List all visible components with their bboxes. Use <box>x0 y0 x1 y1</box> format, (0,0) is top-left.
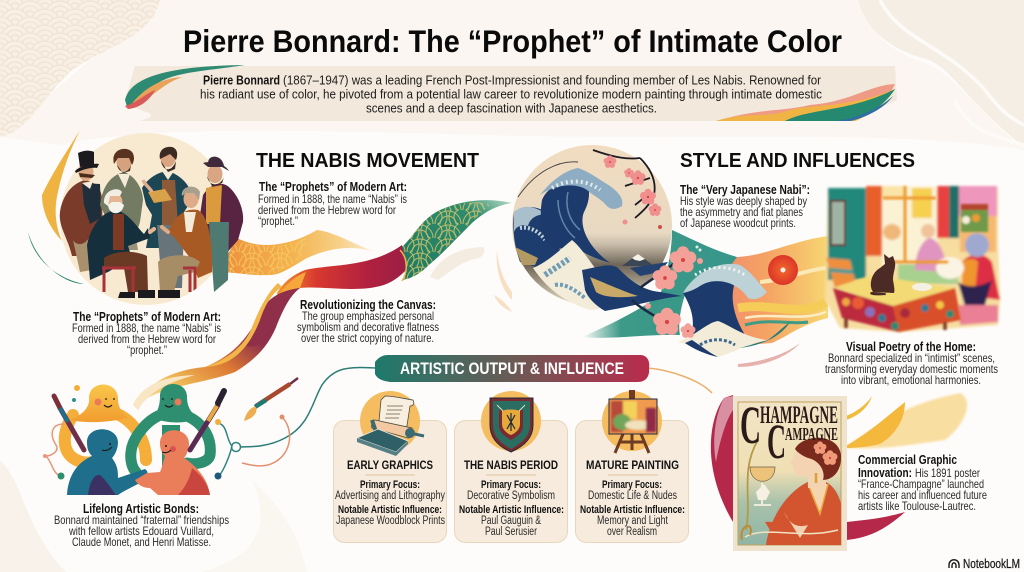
small painting on wall <box>961 204 988 232</box>
text block: prophets of modern art (below portrait): Formed in 1888, the name “Nabis” is <box>72 321 221 335</box>
lower navy wave and boat <box>582 262 682 311</box>
text block: lifelong artistic bonds: Bonnard maintained “fraternal” friendships <box>54 513 229 527</box>
card body: Paul Gauguin & <box>481 515 541 527</box>
ribbon: right teal, salmon and yellow wash <box>582 230 828 345</box>
teal arc beside portrait <box>28 232 84 284</box>
text block: prophets of modern art (below portrait): derived from the Hebrew word for <box>78 332 216 346</box>
paint brushes held <box>54 391 224 450</box>
text block: commercial graphic innovation: Commercial Graphic <box>858 452 957 467</box>
card body: Primary Focus: <box>481 479 541 491</box>
text block: prophets of modern art (right): “prophet.” <box>258 214 298 228</box>
card body <box>459 479 564 538</box>
intro text: his radiant use of color, he pivoted from a potential law career to revolutionize modern painting through intimate domestic <box>200 86 822 102</box>
text block: very Japanese Nabi: His style was deeply shaped by <box>680 194 807 208</box>
text block: prophets of modern art (below portrait) <box>72 309 221 357</box>
card body: Notable Artistic Influence: <box>580 504 685 516</box>
text block: commercial graphic innovation: His 1891 poster <box>915 466 980 480</box>
text block: lifelong artistic bonds: Lifelong Artistic Bonds: <box>83 501 199 516</box>
seated man with grey hair <box>158 187 212 298</box>
illustration: four friends <box>43 384 240 495</box>
text block: lifelong artistic bonds: Claude Monet, and Henri Matisse. <box>72 535 211 549</box>
yellow arc beside portrait <box>42 130 80 241</box>
intro brush stroke: orange left <box>130 77 182 108</box>
card heading: MATURE PAINTING <box>586 458 679 472</box>
text block: revolutionizing the canvas <box>297 297 439 345</box>
card: the Nabis period <box>454 391 568 542</box>
text block: revolutionizing the canvas: symbolism and decorative flatness <box>297 320 439 334</box>
intro band <box>125 65 897 121</box>
intro text: Pierre Bonnard <box>203 72 280 88</box>
text block: visual poetry of the home: Visual Poetry of the Home: <box>846 339 976 354</box>
card body: Primary Focus: <box>602 479 662 491</box>
text block: prophets of modern art (right) <box>258 179 407 228</box>
text block: revolutionizing the canvas: Revolutionizing the Canvas: <box>300 297 436 312</box>
card body <box>335 479 445 527</box>
text block: revolutionizing the canvas: over the strict copying of nature. <box>301 331 434 345</box>
green ribbon end <box>400 200 512 281</box>
card body: Japanese Woodblock Prints <box>336 515 445 527</box>
card body: Advertising and Lithography <box>335 490 445 502</box>
section heading: the Nabis movement: THE NABIS MOVEMENT <box>256 150 479 172</box>
section banner: artistic output and influence: ARTISTIC OUTPUT & INFLUENCE <box>400 359 624 378</box>
yellow figure <box>65 384 146 463</box>
hair <box>795 438 841 480</box>
illustration: domestic painting <box>825 186 1000 332</box>
card body: Primary Focus: <box>360 479 420 491</box>
cat <box>870 254 895 295</box>
poster lettering: AMPAGNE <box>785 424 838 444</box>
intro text: scenes and a deep fascination with Japanese aesthetics. <box>366 100 657 116</box>
text block: lifelong artistic bonds <box>54 501 229 549</box>
teacup <box>912 283 932 291</box>
icon: shield crest <box>481 391 541 452</box>
text block: commercial graphic innovation <box>858 452 987 513</box>
connector lines <box>240 368 712 466</box>
card body: Notable Artistic Influence: <box>459 504 564 516</box>
section heading: style and influences: STYLE AND INFLUENCES <box>680 150 915 172</box>
card heading: THE NABIS PERIOD <box>464 458 558 472</box>
poster lettering <box>740 395 838 469</box>
ribbon: left flowing ribbons <box>28 130 512 410</box>
title: Pierre Bonnard: The “Prophet” of Intimate Color <box>183 23 842 59</box>
card body: Memory and Light <box>597 515 669 527</box>
card heading: EARLY GRAPHICS <box>347 458 433 472</box>
intro text <box>200 72 822 116</box>
card body: over Realism <box>607 526 657 538</box>
illustration: great wave <box>512 145 798 357</box>
text block: prophets of modern art (below portrait): “prophet.” <box>127 343 167 357</box>
painting frame on wall <box>831 201 845 245</box>
cherry branch upper with blossoms <box>593 150 662 229</box>
left waves <box>513 207 566 268</box>
green figure <box>131 384 210 472</box>
pale beige blob <box>430 247 484 280</box>
poster lettering: C <box>740 395 761 455</box>
orange figure <box>135 430 210 495</box>
text block: commercial graphic innovation: “France-Champagne” launched <box>858 477 984 491</box>
card: early graphics <box>334 391 446 542</box>
cherry branches lower <box>632 246 703 338</box>
champagne glass <box>750 467 775 481</box>
intro brush stroke: right waves <box>716 84 895 121</box>
text block: prophets of modern art (right): Formed in 1888, the name “Nabis” is <box>258 192 407 206</box>
text block: visual poetry of the home: into vibrant, emotional harmonies. <box>841 373 981 387</box>
man with brown hat <box>200 157 243 292</box>
intro text: (1867–1947) was a leading French Post-Impressionist and founding member of Les Nabis. Renowned for <box>283 72 822 88</box>
text block: very Japanese Nabi: the asymmetry and fiat planes <box>680 205 803 219</box>
diagonal purple and yellow ribbon tail <box>134 283 300 407</box>
earring <box>815 473 817 483</box>
text block: commercial graphic innovation: his career and influenced future <box>858 488 987 502</box>
icon: paint brush <box>244 378 298 421</box>
orange upper ribbon <box>218 230 378 275</box>
blue figure <box>67 429 148 495</box>
man with book <box>142 147 192 288</box>
flowers in hair <box>814 441 837 465</box>
text block: prophets of modern art (below portrait): The “Prophets” of Modern Art: <box>73 309 221 324</box>
card body <box>580 479 685 538</box>
illustration: France-Champagne poster <box>733 395 847 551</box>
card: mature painting <box>576 390 688 542</box>
text block: commercial graphic innovation: Innovation: <box>858 465 912 480</box>
decorative squiggles and dots <box>43 385 240 480</box>
section banner: artistic output and influence <box>375 355 649 382</box>
card body: Notable Artistic Influence: <box>338 504 442 516</box>
man in green coat <box>100 149 143 250</box>
second wave <box>678 264 790 357</box>
main wave <box>540 168 622 263</box>
text block: very Japanese Nabi: of Japanese woodcut prints. <box>680 216 796 230</box>
card body: Decorative Symbolism <box>467 490 555 502</box>
text block: very Japanese Nabi: The “Very Japanese Nabi”: <box>680 182 810 197</box>
intro brush stroke: red left <box>125 90 155 109</box>
seated man with white beard <box>87 189 155 298</box>
mount fuji <box>622 254 654 266</box>
poster lettering: C <box>767 413 786 469</box>
red sun <box>768 255 798 285</box>
text block: lifelong artistic bonds: with fellow artists Edouard Vuillard, <box>68 524 214 538</box>
text block: commercial graphic innovation: artists like Toulouse-Lautrec. <box>858 499 976 513</box>
window frame <box>883 186 948 262</box>
intro brush stroke: green left <box>125 65 245 107</box>
pale accent swash above figures <box>133 375 195 410</box>
main wave crest outline <box>518 162 578 197</box>
brush strokes behind poster <box>711 343 967 540</box>
card body: Domestic Life & Nudes <box>588 490 677 502</box>
face and neck <box>790 450 826 488</box>
dress <box>766 482 843 545</box>
big cream wave peak <box>533 240 620 310</box>
text block: very Japanese Nabi <box>680 182 810 230</box>
text block: prophets of modern art (right): The “Prophets” of Modern Art: <box>259 179 407 194</box>
man with top hat <box>60 151 103 272</box>
icon: easel with canvas <box>602 390 662 453</box>
poster lettering: HAMPAGNE <box>760 402 838 429</box>
text block: prophets of modern art (right): derived from the Hebrew word for <box>258 203 396 217</box>
red middle ribbon <box>277 245 408 317</box>
card body: Paul Serusier <box>485 526 537 538</box>
icon: printing press <box>357 391 424 456</box>
text block: revolutionizing the canvas: The group emphasized personal <box>302 309 434 323</box>
text block: visual poetry of the home <box>825 339 998 387</box>
table with cloth <box>833 275 961 332</box>
illustration: group of Nabis artists <box>60 133 243 305</box>
